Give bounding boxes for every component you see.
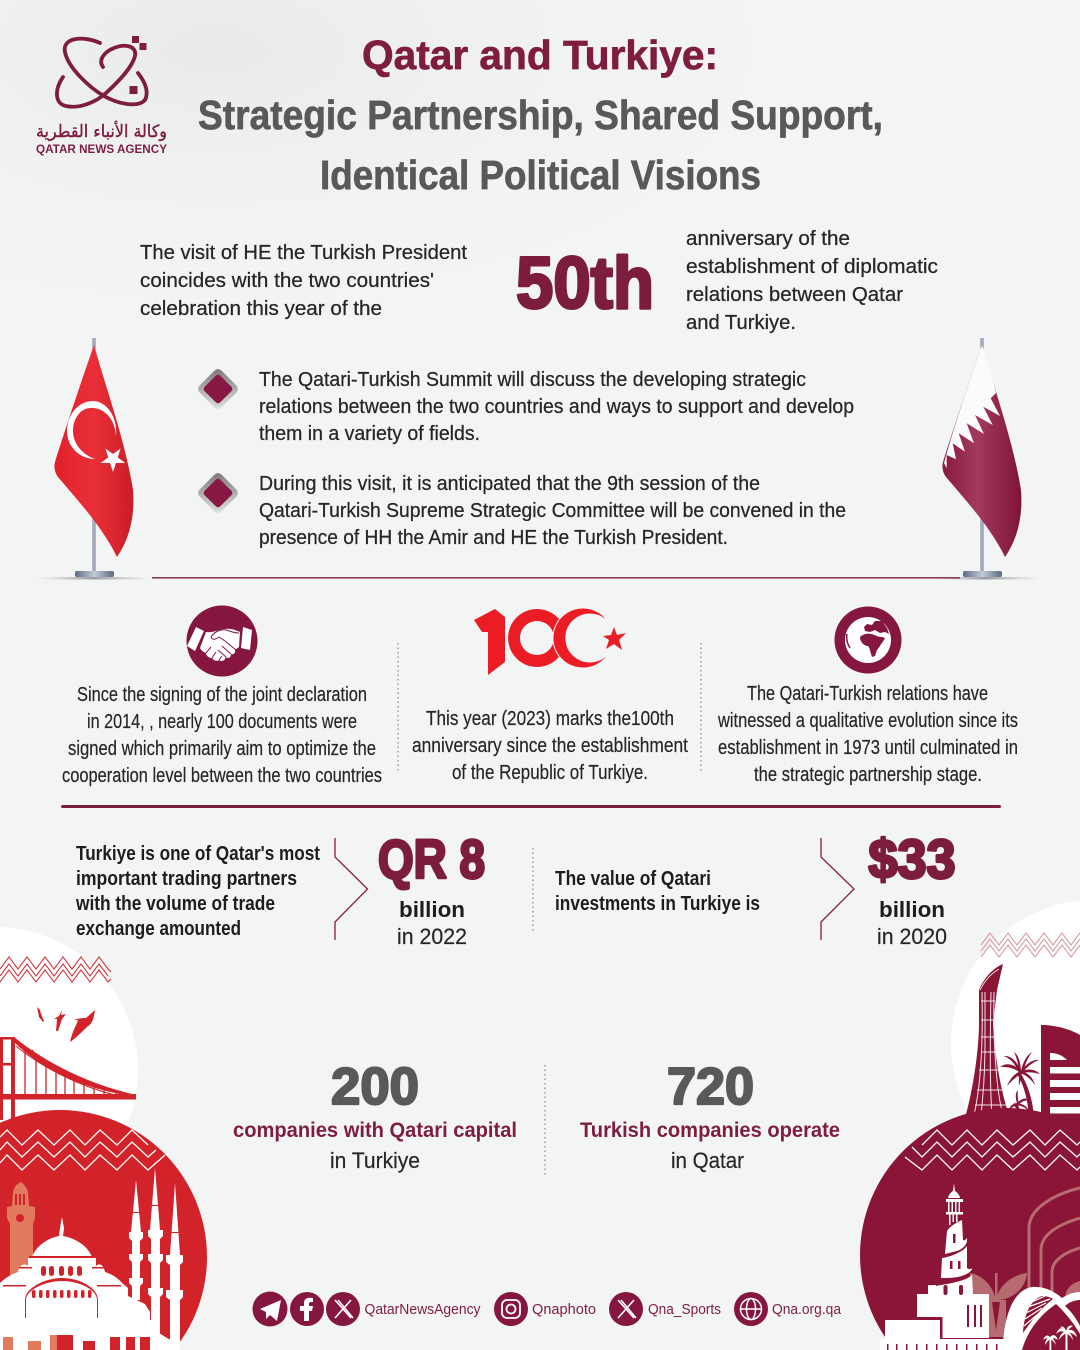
bullet text 1: relations between the two countries and ways to support and develop <box>259 396 854 418</box>
column 2 text: of the Republic of Turkiye. <box>452 762 648 784</box>
stat: 720 Turkish companies: Turkish companies operate <box>580 1119 840 1142</box>
intro text: right: anniversary of the <box>686 228 850 250</box>
investment text <box>555 868 760 915</box>
column 3 text <box>717 683 1018 786</box>
label: Qna.org.qa: Qna.org.qa <box>772 1301 842 1318</box>
stat: $33 billion: $33 <box>868 828 956 890</box>
column 1 text: cooperation level between the two countries <box>62 765 382 787</box>
bullet icon 1 <box>196 367 240 411</box>
trade text: important trading partners <box>76 868 297 890</box>
column 3 text: establishment in 1973 until culminated in <box>718 737 1018 759</box>
label: Qnaphoto: Qnaphoto <box>532 1301 596 1318</box>
title <box>198 32 883 198</box>
bullet text 2: Qatari-Turkish Supreme Strategic Committee will be convened in the <box>259 500 846 522</box>
stat: 200 companies: in Turkiye <box>330 1148 420 1173</box>
arrow: chevron 2 <box>821 838 854 940</box>
icon: X <box>326 1292 360 1326</box>
illustration: Turkiye skyline <box>0 927 207 1350</box>
stat: QR 8 billion: QR 8 <box>378 828 485 890</box>
logo: Qatar News Agency: QATAR NEWS AGENCY <box>36 142 167 156</box>
trade text: exchange amounted <box>76 918 241 940</box>
bullet text 2: During this visit, it is anticipated that the 9th session of the <box>259 473 760 495</box>
icon: website globe <box>734 1292 768 1326</box>
curved building <box>1041 1025 1080 1128</box>
arches <box>1029 1188 1080 1300</box>
bullet icon 2 <box>196 471 240 515</box>
label: QatarNewsAgency: QatarNewsAgency <box>364 1301 481 1318</box>
column 1 text: in 2014, , nearly 100 documents were <box>87 711 357 733</box>
arrow: chevron 1 <box>335 838 368 940</box>
intro text: left: coincides with the two countries' <box>140 270 434 292</box>
column 2 text: This year (2023) marks the100th <box>426 708 674 730</box>
label: Qna_Sports: Qna_Sports <box>648 1301 721 1318</box>
bullet text 1: them in a variety of fields. <box>259 423 480 445</box>
stat: QR 8 billion: in 2022 <box>397 924 467 949</box>
stat: 200 companies <box>233 1058 517 1173</box>
intro text: left: The visit of HE the Turkish President <box>140 242 467 264</box>
minarets <box>129 1168 183 1350</box>
bullet text 1 <box>259 369 854 445</box>
icon: telegram <box>252 1292 288 1326</box>
intro text: right <box>686 228 938 334</box>
museum arches <box>1003 1287 1080 1350</box>
stat: 720 Turkish companies: in Qatar <box>671 1148 744 1173</box>
intro text: left: celebration this year of the <box>140 298 382 320</box>
trade text <box>75 843 320 940</box>
icon: globe <box>834 606 902 674</box>
intro text: right: establishment of diplomatic <box>686 256 938 278</box>
trade text: with the volume of trade <box>75 893 275 915</box>
icon: X sports <box>609 1292 643 1326</box>
big number: 50th: 50th <box>516 243 654 324</box>
icon: facebook <box>290 1292 324 1326</box>
Al Fanar tower <box>880 1183 1004 1350</box>
intro text: right: and Turkiye. <box>686 312 796 334</box>
column 3 text: The Qatari-Turkish relations have <box>747 683 988 705</box>
title: Identical Political Visions <box>320 152 761 198</box>
stat: $33 billion <box>868 828 956 949</box>
stat: QR 8 billion: billion <box>399 897 465 922</box>
Turkish flag <box>37 338 150 580</box>
logo: Qatar News Agency: وكالة الأنباء القطرية <box>36 121 167 142</box>
column 2 text <box>412 708 688 784</box>
bullet text 2: presence of HH the Amir and HE the Turkish President. <box>259 527 728 549</box>
intro text: right: relations between Qatar <box>686 284 903 306</box>
investment text: The value of Qatari <box>555 868 711 890</box>
title: Strategic Partnership, Shared Support, <box>198 92 883 138</box>
white palms <box>1043 1326 1077 1350</box>
palms <box>1000 1052 1040 1118</box>
column 3 text: witnessed a qualitative evolution since its <box>717 710 1018 732</box>
footer: social links <box>252 1292 842 1326</box>
bridge <box>0 1037 136 1120</box>
stat: 720 Turkish companies <box>580 1058 840 1173</box>
stat: 720 Turkish companies: 720 <box>667 1058 754 1116</box>
open book <box>970 1273 1027 1337</box>
column 2 text: anniversary since the establishment <box>412 735 688 757</box>
icon: Turkish 100th anniversary logo <box>474 608 626 675</box>
column 1 text: signed which primarily aim to optimize the <box>68 738 376 760</box>
stat: QR 8 billion <box>378 828 485 949</box>
illustration: Qatar skyline <box>860 900 1080 1350</box>
clock tower <box>7 1175 35 1282</box>
stat: $33 billion: in 2020 <box>877 924 947 949</box>
title: Qatar and Turkiye: <box>362 32 718 78</box>
logo: Qatar News Agency <box>36 36 167 156</box>
column 1 text: Since the signing of the joint declaration <box>77 684 367 706</box>
icon: handshake <box>186 606 258 676</box>
stat: 200 companies: companies with Qatari capital <box>233 1119 517 1142</box>
bullet text 1: The Qatari-Turkish Summit will discuss the developing strategic <box>259 369 806 391</box>
column 3 text: the strategic partnership stage. <box>754 764 982 786</box>
Aspire tower <box>965 964 1010 1118</box>
stat: 200 companies: 200 <box>331 1058 419 1116</box>
mosque <box>0 1217 180 1350</box>
intro text: left <box>140 242 467 320</box>
trade text: Turkiye is one of Qatar's most <box>76 843 320 865</box>
stat: $33 billion: billion <box>879 897 945 922</box>
investment text: investments in Turkiye is <box>555 893 760 915</box>
bullet text 2 <box>259 473 846 549</box>
Qatar flag <box>930 338 1040 580</box>
column 1 text <box>62 684 382 787</box>
icon: instagram <box>494 1292 528 1326</box>
birds <box>37 1007 95 1042</box>
